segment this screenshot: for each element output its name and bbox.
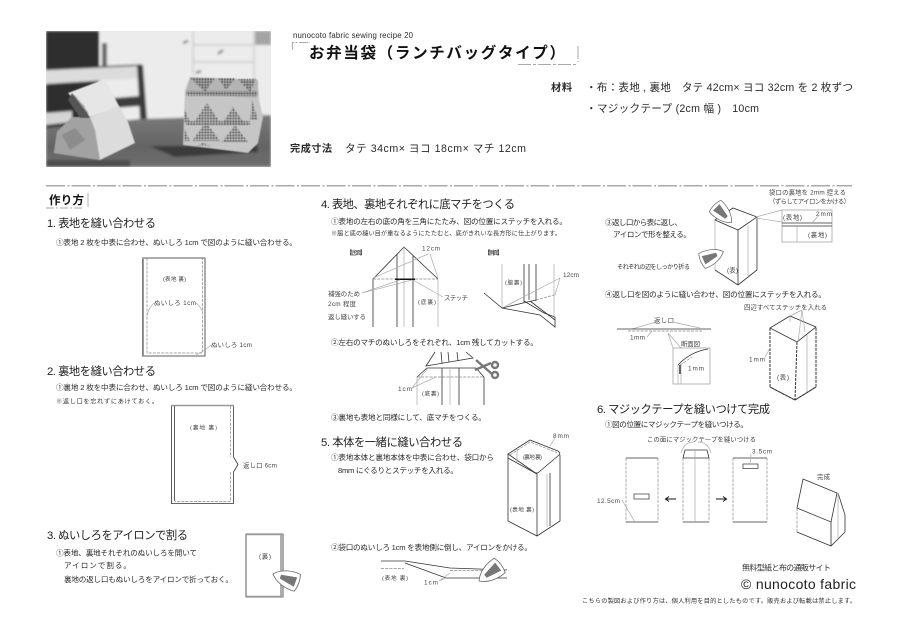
step 2 diagram: (裏地 裏) [190, 424, 217, 432]
note: 2mm offset [769, 188, 850, 206]
icon: scissors [475, 360, 498, 378]
diagram: bottom view: 補強のため [328, 289, 360, 298]
diagram: closing opening [617, 316, 711, 384]
diagram: bottom view [328, 246, 468, 327]
step 4 text 3: ③裏地も表地と同様にして、底マチをつくる。 [331, 412, 486, 422]
photo: two lunch bags on a table [46, 31, 271, 167]
diagram: stitched box: (裏地 裏) [523, 453, 542, 461]
diagram: center panel [681, 442, 711, 522]
step 5 [321, 433, 569, 588]
recipe series label: nunocoto fabric sewing recipe 20 [293, 31, 414, 40]
finished size: 完成寸法 [290, 142, 332, 155]
text 4: ④返し口を図のように縫い合わせ、図の位置にステッチを入れる。 [605, 289, 826, 299]
copyright note: こちらの製図および作り方は、個人利用を目的としたものです。販売および転載は禁止します。 [582, 597, 856, 605]
icon: iron top [708, 199, 737, 228]
diagram: turned box: (表) [727, 266, 738, 274]
diagram: stitched box: 1mm [749, 356, 765, 364]
materials: ・布：表地 , 裏地 タテ 42cm× ヨコ 32cm を 2 枚ずつ [586, 81, 853, 94]
diagram: ironing seam: (表地 裏) [382, 574, 408, 582]
diagram: bottom view: ステッチ [444, 294, 468, 302]
finished size: タテ 34cm× ヨコ 18cm× マチ 12cm [345, 143, 526, 155]
step 1 heading: 1. 表地を縫い合わせる [47, 216, 156, 230]
diagram: cutting seam allowance: (底裏) [422, 390, 439, 398]
step 1 diagram: (表地 裏) [163, 275, 186, 283]
diagram: side view: 12cm [563, 272, 579, 279]
step 2 diagram [171, 405, 277, 504]
step 5 text 2: ②袋口のぬいしろ 1cm を表地側に倒し、アイロンをかける。 [331, 542, 532, 552]
materials: 材料 [551, 81, 572, 94]
diagram: stitched box [749, 310, 816, 400]
step 3 text: ①表地、裏地それぞれのぬいしろを開いて [56, 548, 197, 558]
heading: how to make [46, 193, 88, 208]
icon: iron bottom [697, 244, 727, 269]
step 3 [47, 529, 302, 597]
step 4 heading: 4. 表地、裏地それぞれに底マチをつくる [321, 198, 515, 211]
diagram: bottom view: 返し縫いする [328, 312, 366, 321]
step 6 [597, 402, 845, 546]
diagram: finished bag [797, 472, 845, 546]
arrow: right [716, 496, 726, 502]
diagram: closing opening: 断面図 [681, 339, 700, 348]
diagram: left panel: 12.5cm [597, 498, 620, 505]
materials: ・マジックテープ (2cm 幅 ) 10cm [586, 102, 759, 115]
icon: iron [270, 565, 302, 592]
step 1 diagram: ぬいしろ 1cm [154, 299, 196, 307]
diagram: side view [484, 249, 579, 327]
step 2 note: ※返し口を忘れずにあけておく。 [56, 398, 158, 406]
step 2 [47, 364, 297, 504]
diagram: bottom view: 2cm 程度 [328, 299, 357, 308]
step 3 diagram: (裏) [259, 552, 271, 560]
diagram: side view: (脇裏) [505, 278, 522, 286]
arrow: left [666, 496, 676, 502]
diagram: right panel [733, 448, 772, 522]
step 1 diagram: ぬいしろ 1cm [211, 341, 252, 349]
step 3 text [56, 548, 233, 584]
credit: free patterns: 無料型紙と布の通販サイト [742, 562, 831, 572]
text 3: アイロンで形を整える。 [613, 229, 691, 239]
diagram: cutting seam allowance [398, 352, 498, 405]
diagram: ironing seam [381, 557, 507, 588]
detail box: 2mm: (表地) [783, 212, 802, 222]
diagram: closing opening: 返し口 [654, 316, 674, 324]
step 5 heading: 5. 本体を一緒に縫い合わせる [321, 435, 463, 449]
step 1 text: ①表地 2 枚を中表に合わせ、ぬいしろ 1cm で図のように縫い合わせる。 [56, 237, 297, 247]
icon: iron [473, 557, 507, 588]
step 5 text: 8mm にぐるりとステッチを入れる。 [338, 466, 458, 475]
step 4 text: ①表地の左右の底の角を三角にたたみ、図の位置にステッチを入れる。 [331, 216, 567, 226]
step 5 text: ①表地本体と裏地本体を中表に合わせ、袋口から [331, 452, 494, 462]
diagram: left panel [597, 458, 658, 522]
step 4 note: ※脇と底の縫い目が重なるようにたたむと、底がきれいな長方形に仕上がります。 [331, 230, 561, 238]
diagram: bottom view: 【底面】 [346, 249, 366, 257]
diagram: cutting seam allowance: 1cm [398, 386, 412, 393]
materials [551, 81, 853, 115]
text 3 [605, 217, 691, 239]
step 3 text: アイロンで割る。 [64, 560, 131, 570]
text 3: ③返し口から表に返し、 [605, 217, 682, 227]
diagram: closing opening: 1mm [688, 366, 704, 372]
diagram: finished bag: 完成 [817, 472, 831, 481]
step 1 diagram [142, 258, 252, 356]
text: fold edges: それぞれの辺をしっかり折る [617, 263, 690, 271]
diagram: stitched box: 8mm [553, 433, 569, 440]
heading: how to make: 作り方 [49, 193, 84, 207]
step 2 heading: 2. 裏地を縫い合わせる [47, 364, 156, 378]
detail box: 2mm [756, 210, 832, 242]
detail box: 2mm: 2mm [816, 211, 832, 218]
diagram: stitched box [508, 433, 569, 536]
diagram: stitched box: (表) [777, 372, 789, 382]
step 1 [47, 216, 297, 356]
detail box: 2mm: (裏地) [808, 230, 827, 239]
diagram: bottom view: 12cm [422, 246, 440, 252]
diagram: side view: 【側面】 [484, 249, 503, 257]
step 2 diagram: 返し口 6cm [243, 462, 277, 470]
step 3 text: 裏地の返し口もぬいしろをアイロンで折っておく。 [64, 574, 233, 584]
diagram: closing opening: 1mm [630, 334, 645, 342]
step 3 diagram [246, 534, 302, 597]
step 3 heading: 3. ぬいしろをアイロンで割る [47, 529, 188, 542]
diagram: ironing seam: 1cm [424, 580, 438, 586]
step 4 [321, 198, 579, 422]
step 4 text 2: ②左右のマチのぬいしろをそれぞれ、1cm 残してカットする。 [331, 337, 538, 347]
step 2 text: ①裏地 2 枚を中表に合わせ、ぬいしろ 1cm で図のように縫い合わせる。 [56, 382, 297, 392]
diagram: turned box [697, 199, 757, 285]
brand: © nunocoto fabric [741, 576, 856, 592]
diagram: stitched box: (表地 裏) [510, 506, 534, 514]
note: 2mm offset: 袋口の裏地を 2mm 控える [769, 188, 846, 196]
step 6 heading: 6. マジックテープを縫いつけて完成 [597, 402, 770, 416]
diagram: right panel: 3.5cm [752, 448, 772, 456]
title with dashed bracket: お弁当袋（ランチバッグタイプ） [309, 43, 565, 62]
label: stitch all sides: 四辺すべてステッチを入れる [744, 304, 827, 312]
diagram: bottom view: (底裏) [418, 298, 436, 306]
step 4 continued [605, 188, 850, 400]
note: 2mm offset: （ずらしてアイロンをかける） [769, 196, 850, 206]
label: this side: この面にマジックテープを縫いつける [647, 434, 756, 444]
title with dashed bracket [292, 42, 578, 64]
step 5 text [331, 452, 494, 475]
step 6 text: ①図の位置にマジックテープを縫いつける。 [605, 419, 748, 429]
